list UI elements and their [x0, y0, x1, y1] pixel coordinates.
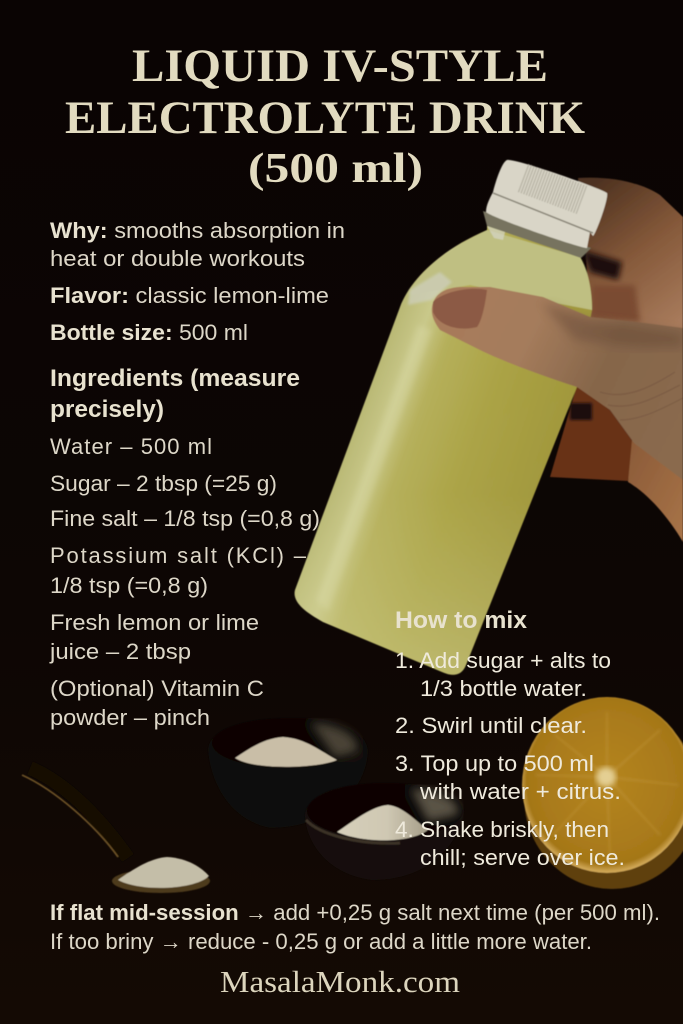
- hand: thumb: [432, 287, 683, 480]
- title: LIQUID IV-STYLE: [132, 40, 548, 92]
- ingredients list: (Optional) Vitamin C: [50, 676, 264, 701]
- website credit: MasalaMonk.com: [220, 964, 460, 999]
- ingredients list: Water – 500 ml: [50, 434, 212, 459]
- troubleshooting note: If too briny → reduce - 0,25 g or add a little more water.: [50, 929, 592, 954]
- photo: back bowl of powder: [208, 718, 368, 828]
- how to mix steps: 3. Top up to 500 ml: [395, 751, 594, 776]
- hand: knuckle wrinkles: [600, 372, 683, 420]
- hand: lower wrist: [628, 440, 683, 542]
- lemon segments: [536, 712, 678, 858]
- bottle frosted patch: [408, 272, 452, 305]
- bottle body: [295, 223, 592, 675]
- ingredients list: Fine salt – 1/8 tsp (=0,8 g): [50, 506, 320, 531]
- intro text block: heat or double workouts: [50, 246, 305, 271]
- bottle neck: [483, 211, 591, 258]
- troubleshooting note: [50, 900, 660, 954]
- how to mix steps: chill; serve over ice.: [420, 845, 625, 870]
- how to mix steps: 4. Shake briskly, then: [395, 817, 609, 842]
- photo: hand holding bottle: [295, 160, 683, 675]
- title: (500 ml): [248, 146, 423, 192]
- ingredients heading: [50, 365, 300, 423]
- how to mix steps: 1/3 bottle water.: [420, 676, 587, 701]
- bottle cap: [486, 160, 607, 248]
- intro text block: Why: smooths absorption in: [50, 218, 345, 243]
- hand: dark gap by bottle neck: [582, 250, 622, 280]
- bottle: [295, 160, 607, 675]
- intro text block: Bottle size: 500 ml: [50, 320, 248, 345]
- how to mix steps: with water + citrus.: [419, 779, 621, 804]
- intro text block: [50, 218, 345, 345]
- hand: black gap under thumb: [570, 403, 592, 420]
- ingredients list: Sugar – 2 tbsp (=25 g): [50, 471, 277, 496]
- photo: lemon half: [522, 697, 683, 889]
- troubleshooting note: If flat mid-session → add +0,25 g salt next time (per 500 ml).: [50, 900, 660, 925]
- ingredients list: juice – 2 tbsp: [49, 639, 191, 664]
- ingredients heading: precisely): [50, 396, 164, 423]
- ingredients list: Fresh lemon or lime: [50, 610, 259, 635]
- title: ELECTROLYTE DRINK: [65, 92, 585, 144]
- hand: back of hand behind bottle: [578, 178, 683, 340]
- ingredients list: Potassium salt (KCl) –: [50, 543, 307, 568]
- ingredients heading: Ingredients (measure: [50, 365, 300, 392]
- hand: thumb shadow: [540, 302, 683, 348]
- hand: reddish fingers under thumb: [550, 385, 634, 481]
- photo: spoon of powder: [22, 768, 210, 893]
- how to mix heading: How to mix: [395, 607, 528, 634]
- cap ridges: [523, 178, 582, 200]
- how to mix steps: 2. Swirl until clear.: [395, 713, 587, 738]
- ingredients list: [49, 434, 320, 730]
- photo: front bowl of powder: [305, 783, 464, 880]
- ingredients list: 1/8 tsp (=0,8 g): [50, 573, 208, 598]
- title: [65, 40, 585, 192]
- bottle upper shoulder: [408, 230, 592, 310]
- how to mix steps: 1. Add sugar + alts to: [395, 648, 611, 673]
- how to mix steps: [395, 648, 625, 870]
- hand: fingers behind thumb: [590, 285, 640, 322]
- intro text block: Flavor: classic lemon-lime: [50, 283, 329, 308]
- ingredients list: powder – pinch: [50, 705, 210, 730]
- bottle highlight: [316, 325, 432, 612]
- hand: thumb nail: [433, 289, 487, 329]
